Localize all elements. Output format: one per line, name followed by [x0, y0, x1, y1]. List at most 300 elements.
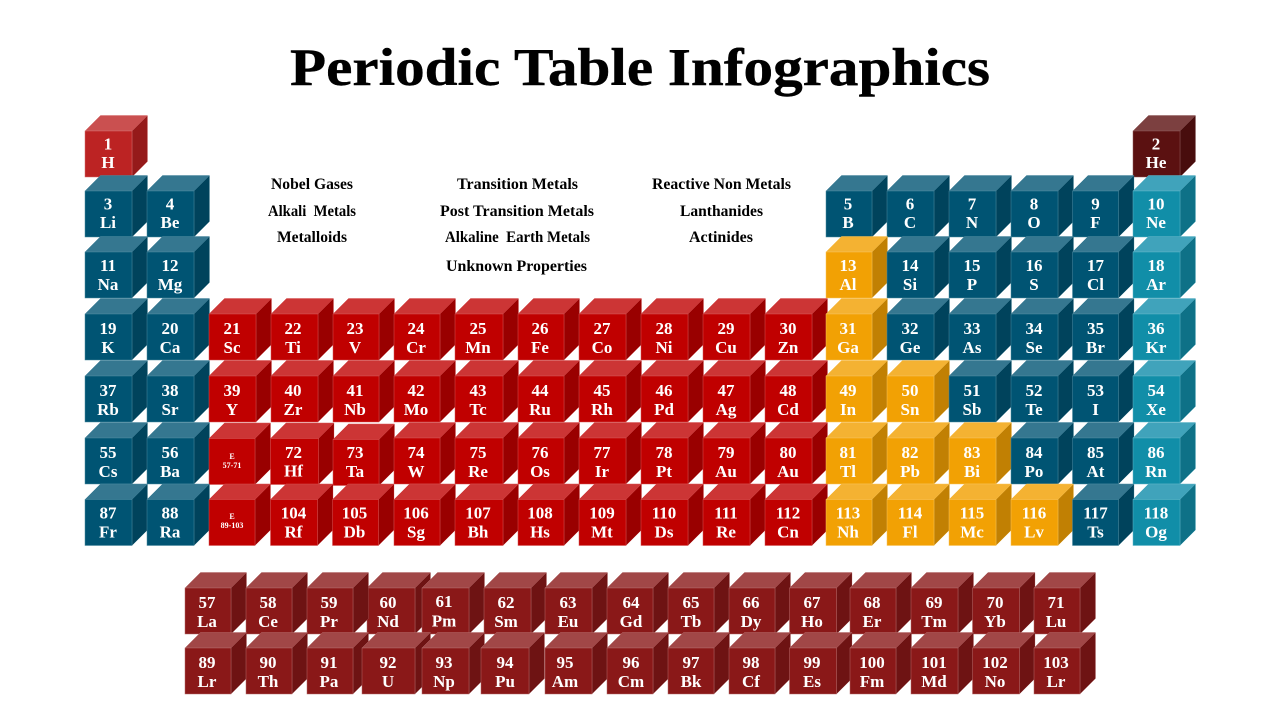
element: Cd [765, 360, 828, 422]
element: Li: 3 [104, 194, 112, 214]
element: Bi: 83 [964, 443, 980, 462]
element: Se [1011, 298, 1074, 360]
element: Ne [1133, 176, 1196, 237]
element: Bh: Bh [468, 522, 489, 542]
element: Pm: Pm [432, 612, 456, 630]
element: Pd: 46 [656, 381, 672, 400]
element: Ti: Ti [285, 338, 301, 357]
element: Md: Md [921, 672, 947, 691]
element: Lr (89): 89 [198, 653, 216, 672]
element: Sg: 106 [403, 504, 429, 522]
element: Zr: 40 [284, 381, 302, 400]
element: Ru [518, 360, 580, 422]
element: B: 5 [844, 194, 852, 214]
element: F: F [1090, 213, 1101, 232]
element: S: S [1029, 275, 1039, 294]
element: No: 102 [982, 653, 1008, 672]
element: Re (111): 111 [714, 504, 738, 522]
element: lanthanide placeholder: E [229, 452, 235, 461]
element: Ce: 58 [260, 593, 276, 612]
element: Ag [703, 360, 766, 422]
element: Md: 101 [921, 653, 947, 672]
element: Rh: Rh [591, 400, 613, 419]
legend: Actinides: Actinides [689, 229, 753, 246]
element: W: W [408, 462, 424, 481]
element: He: He [1146, 153, 1167, 172]
element: I: 53 [1087, 381, 1104, 400]
element: Ni: 28 [656, 319, 672, 338]
element: Ne: Ne [1146, 213, 1166, 232]
element: Pb: Pb [900, 462, 920, 481]
element: Ti: 22 [284, 319, 302, 338]
element: Re (111): Re [716, 522, 736, 542]
element: Mo [394, 360, 456, 422]
element: Es: 99 [804, 653, 820, 672]
element: Ru: 44 [532, 381, 549, 400]
element: Np: 93 [436, 653, 452, 672]
element: lanthanide placeholder [209, 423, 270, 484]
element: Rn [1133, 422, 1196, 484]
element: Ho [790, 572, 852, 634]
element: Li [85, 176, 148, 237]
element: Pt: 78 [656, 443, 672, 462]
element: Ba [147, 422, 210, 484]
legend: Unknown Properties: Unknown Properties [446, 258, 587, 275]
element: Hf: 72 [285, 443, 302, 462]
element: S: 16 [1026, 256, 1042, 275]
element: Am: 95 [556, 653, 574, 672]
panel: lanthanides and actinides [185, 572, 1096, 694]
element: Re: Re [468, 462, 488, 481]
element: Cn: 112 [776, 504, 800, 522]
legend: Lanthanides: Lanthanides [680, 203, 763, 220]
element: Gd: Gd [620, 612, 643, 631]
element: Lr: 103 [1043, 653, 1069, 672]
element: Ar: Ar [1146, 275, 1166, 294]
element: Sm: 62 [498, 593, 514, 612]
element: Cr: 24 [408, 319, 425, 338]
element: Bk: Bk [681, 672, 702, 691]
element: O: 8 [1030, 194, 1038, 214]
element: In: In [840, 400, 857, 419]
element: Ba: 56 [162, 443, 178, 462]
legend: Post Transition Metals: Post Transition Metals [440, 203, 594, 220]
element: Cu [703, 298, 766, 360]
element: Ga [826, 298, 888, 360]
element: Eu [545, 572, 608, 634]
element: Lv [1011, 484, 1074, 546]
element: Mg [147, 236, 210, 298]
element: Rf: 104 [281, 504, 307, 522]
element: Al [826, 236, 888, 298]
legend: Alkaline Earth Metals: Alkaline Earth Metals [445, 229, 590, 246]
element: Ds [641, 484, 704, 546]
element: Kr: 36 [1148, 319, 1164, 338]
element: Gd [607, 572, 668, 634]
element: Sn: Sn [901, 400, 920, 419]
element: O [1011, 176, 1074, 237]
element: Cf [729, 632, 790, 694]
element: Zn: Zn [778, 338, 799, 357]
element: Tl: 81 [840, 443, 856, 462]
element: Lv: 116 [1022, 504, 1046, 522]
element: Ti [271, 298, 334, 360]
element: Er: 68 [864, 593, 880, 612]
element: Bk [668, 632, 730, 694]
element: Au: 79 [718, 443, 734, 462]
element: Ar: 18 [1148, 256, 1164, 275]
element: Y [209, 360, 272, 422]
element: Pd: Pd [654, 400, 674, 419]
element: Co: 27 [594, 319, 611, 338]
element: Sc [209, 298, 272, 360]
element: Cn: Cn [777, 522, 799, 542]
element: Fe [518, 298, 580, 360]
element: Au [703, 422, 766, 484]
element: Fm [850, 632, 912, 694]
element: N: N [966, 213, 979, 232]
element: U: U [382, 672, 394, 691]
element: Cm: 96 [622, 653, 640, 672]
element: B [826, 176, 888, 237]
element: Dy: 66 [742, 593, 760, 612]
element: La: 57 [198, 593, 216, 612]
element: Np [422, 632, 484, 694]
element: Ir: Ir [595, 462, 610, 481]
element: actinide placeholder [209, 484, 270, 546]
element: Mg: 12 [162, 256, 178, 275]
element: Tm: 69 [926, 593, 942, 612]
element: Ag: Ag [716, 400, 737, 419]
element: Au (80) [765, 422, 828, 484]
element: Ho: 67 [804, 593, 821, 612]
element: Md [911, 632, 974, 694]
element: B: B [842, 213, 854, 232]
element: Be: 4 [166, 194, 175, 214]
legend: Metalloids: Metalloids [277, 229, 347, 246]
element: Og [1133, 484, 1196, 546]
element: Si: 14 [902, 256, 919, 275]
element: Bh: 107 [465, 504, 491, 522]
element: Pt [641, 422, 704, 484]
element: Al: Al [840, 275, 857, 294]
element: Po [1011, 422, 1074, 484]
element: La: La [197, 612, 217, 631]
element: Zn [765, 298, 828, 360]
element: N [949, 176, 1012, 237]
element: Co: Co [592, 338, 612, 357]
element: Ra: 88 [162, 504, 178, 522]
element: Zr [271, 360, 334, 422]
element: Os: 76 [532, 443, 548, 462]
element: Ta: 73 [346, 443, 364, 462]
element: Ce [246, 572, 308, 634]
element: Mc: 115 [960, 504, 984, 522]
element: I: I [1092, 400, 1099, 419]
element: C: 6 [906, 194, 914, 214]
element: Se: 34 [1026, 319, 1043, 338]
element: I [1072, 360, 1134, 422]
element: Pr: 59 [320, 593, 338, 612]
element: Pm [422, 572, 484, 634]
element: Mt: 109 [589, 504, 615, 522]
element: Cl: Cl [1087, 275, 1104, 294]
element: Sc: Sc [224, 338, 241, 357]
element: Nh: Nh [837, 522, 859, 542]
element: P: 15 [964, 256, 980, 275]
element: Gd: 64 [622, 593, 640, 612]
element: Al: 13 [840, 256, 856, 275]
element: Sn [887, 360, 950, 422]
element: Pd [641, 360, 704, 422]
element: No [972, 632, 1035, 694]
element: Ho: Ho [801, 612, 823, 631]
element: Kr: Kr [1146, 338, 1167, 357]
element: Tb: 65 [682, 593, 700, 612]
element: Re: 75 [470, 443, 486, 462]
element: Ta [333, 424, 394, 486]
element: W: 74 [408, 443, 425, 462]
element: Ra [147, 484, 210, 546]
element: Fe: 26 [532, 319, 548, 338]
element: Pr: Pr [320, 612, 338, 631]
element: Tm [911, 572, 974, 634]
element: N: 7 [968, 194, 977, 214]
element: Mt: Mt [591, 522, 613, 542]
element: Lr: Lr [1047, 672, 1066, 691]
element: W [394, 422, 456, 484]
element: Yb: 70 [986, 593, 1004, 612]
element: In [826, 360, 888, 422]
element: Lr [1034, 632, 1096, 694]
element: Cs: Cs [99, 462, 118, 481]
element: Br: Br [1086, 338, 1105, 357]
element: Ga: 31 [840, 319, 856, 338]
element: As: 33 [964, 319, 980, 338]
element: Rh: 45 [594, 381, 610, 400]
legend labels [268, 176, 791, 275]
element: Tc [455, 360, 518, 422]
element: Ag: 47 [718, 381, 735, 400]
element: Cu: 29 [718, 319, 734, 338]
element: Ta: Ta [346, 462, 365, 481]
element: Lr (89) [185, 632, 246, 694]
element: C: C [904, 213, 916, 232]
element: K [85, 298, 148, 360]
element: Au (80): Au [777, 462, 799, 481]
element: Pa: 91 [320, 653, 338, 672]
element: Sb: 51 [964, 381, 980, 400]
element: Ge: Ge [900, 338, 921, 357]
element: Sb: Sb [963, 400, 981, 419]
element: Nd: Nd [377, 612, 399, 631]
legend: Nobel Gases: Nobel Gases [271, 176, 353, 193]
element: Fr [85, 484, 148, 546]
element: Na: Na [98, 275, 119, 294]
element: Os: Os [530, 462, 550, 481]
element: Br: 35 [1087, 319, 1104, 338]
element: Hs: Hs [530, 522, 550, 542]
element: Nh [826, 484, 888, 546]
element: Ba: Ba [160, 462, 180, 481]
element: Ni [641, 298, 704, 360]
element: Zn: 30 [780, 319, 796, 338]
element: He [1133, 116, 1196, 177]
element: Cm [607, 632, 668, 694]
element: Fl: 114 [898, 504, 923, 522]
element: Ra: Ra [160, 522, 181, 542]
element: Fm: Fm [860, 672, 884, 691]
element: Og: Og [1145, 522, 1167, 542]
element: actinide placeholder: E [229, 512, 235, 521]
element: Th [246, 632, 308, 694]
element: Xe: 54 [1148, 381, 1165, 400]
element: Na: 11 [100, 256, 116, 275]
element: Db [332, 484, 394, 546]
element: Re (111) [703, 484, 766, 546]
element: Nb [333, 360, 394, 422]
element: Te [1011, 360, 1074, 422]
element: Hs [518, 484, 580, 546]
element: Lu: 71 [1048, 593, 1064, 612]
element: Cm: Cm [618, 672, 644, 691]
element: Pr [307, 572, 368, 634]
element: Mn: Mn [465, 338, 491, 357]
element: Bk: 97 [682, 653, 700, 672]
element: Be [147, 176, 210, 237]
element: Pm: 61 [436, 592, 452, 611]
element: Sm [484, 572, 546, 634]
element: H: H [101, 153, 115, 172]
element: Pu: Pu [495, 672, 515, 691]
element: Tl: Tl [840, 462, 856, 481]
element: Yb [972, 572, 1035, 634]
element: Ca: Ca [160, 338, 181, 357]
element: K: 19 [100, 319, 116, 338]
element: Nd [367, 572, 430, 634]
element: Ne: 10 [1148, 194, 1164, 214]
element: Ds: Ds [655, 522, 674, 542]
element: Br [1072, 298, 1134, 360]
element: V [333, 298, 394, 360]
element: Sg [394, 484, 456, 546]
element: Cl: 17 [1087, 256, 1104, 275]
element: Tb: Tb [681, 612, 701, 631]
element: Mc: Mc [960, 522, 984, 542]
element: Tc: 43 [470, 381, 486, 400]
element: Si: Si [903, 275, 917, 294]
element: Na [85, 236, 148, 298]
element: Lu [1034, 572, 1096, 634]
element: Y: 39 [224, 381, 240, 400]
element: Sr: Sr [162, 400, 179, 419]
element: Cd: 48 [780, 381, 796, 400]
element: Ga: Ga [837, 338, 859, 357]
element: Rb: Rb [97, 400, 119, 419]
element: Cr [394, 298, 456, 360]
element: Ir: 77 [594, 443, 611, 462]
element: Sm: Sm [494, 612, 518, 631]
element: Db: 105 [342, 504, 367, 522]
element: Th: Th [258, 672, 279, 691]
element: Xe: Xe [1146, 400, 1166, 419]
element: F: 9 [1091, 194, 1100, 214]
element: S [1011, 236, 1074, 298]
element: Eu: Eu [558, 612, 578, 631]
element: Hf: Hf [284, 462, 303, 480]
element: Hs: 108 [527, 504, 553, 522]
element: At [1072, 422, 1134, 484]
element: Mc [949, 484, 1012, 546]
element: At: 85 [1087, 443, 1104, 462]
element: He: 2 [1152, 134, 1160, 154]
element: Rf: Rf [285, 522, 303, 542]
element: Co [579, 298, 642, 360]
element: Pa: Pa [320, 672, 339, 691]
element: Pu [481, 632, 544, 694]
element: Au: Au [715, 462, 737, 481]
element: Fm: 100 [859, 653, 885, 672]
element: Fr: 87 [100, 504, 117, 522]
element: Zr: Zr [284, 400, 303, 419]
element: Pu: 94 [496, 653, 514, 672]
element: C [887, 176, 950, 237]
element: As: As [963, 338, 982, 357]
element: Cf: 98 [742, 653, 760, 672]
element: Ge: 32 [902, 319, 918, 338]
element: Se: Se [1026, 338, 1043, 357]
element: Mg: Mg [158, 275, 183, 294]
element: Ge [887, 298, 950, 360]
element: Nb: Nb [344, 400, 366, 419]
element: Ts: 117 [1083, 504, 1108, 522]
element: Ni: Ni [656, 338, 673, 357]
element: Sc: 21 [224, 319, 240, 338]
element: Og: 118 [1144, 504, 1168, 522]
element: Es: Es [803, 672, 821, 691]
element: Th: 90 [260, 653, 276, 672]
element: Y: Y [226, 400, 238, 419]
legend: Alkali Metals: Alkali Metals [268, 203, 356, 220]
element: Cu: Cu [715, 338, 737, 357]
element: Lr (89): Lr [198, 672, 217, 691]
element: Nh: 113 [836, 504, 860, 522]
element: Be: Be [161, 213, 180, 232]
element: Mt [579, 484, 642, 546]
element: V: V [349, 338, 362, 357]
panel: main periodic table [85, 116, 1196, 546]
element: Er [850, 572, 912, 634]
element: Db: Db [344, 522, 365, 542]
element: P [949, 236, 1012, 298]
element: Nb: 41 [346, 381, 364, 400]
element: Po: 84 [1026, 443, 1043, 462]
element: Mn [455, 298, 518, 360]
element: V: 23 [346, 319, 364, 338]
element: Ca: 20 [162, 319, 178, 338]
element: Pb [887, 422, 950, 484]
element: Tb [668, 572, 730, 634]
element: Fl: Fl [902, 522, 918, 542]
element: Po: Po [1025, 462, 1043, 481]
element: Tl [826, 422, 888, 484]
element: Hf [270, 423, 334, 484]
element: No: No [985, 672, 1005, 691]
element: Te: Te [1025, 400, 1043, 419]
legend: Reactive Non Metals: Reactive Non Metals [652, 176, 791, 193]
element: Rb: 37 [100, 381, 117, 400]
element: Am [545, 632, 608, 694]
